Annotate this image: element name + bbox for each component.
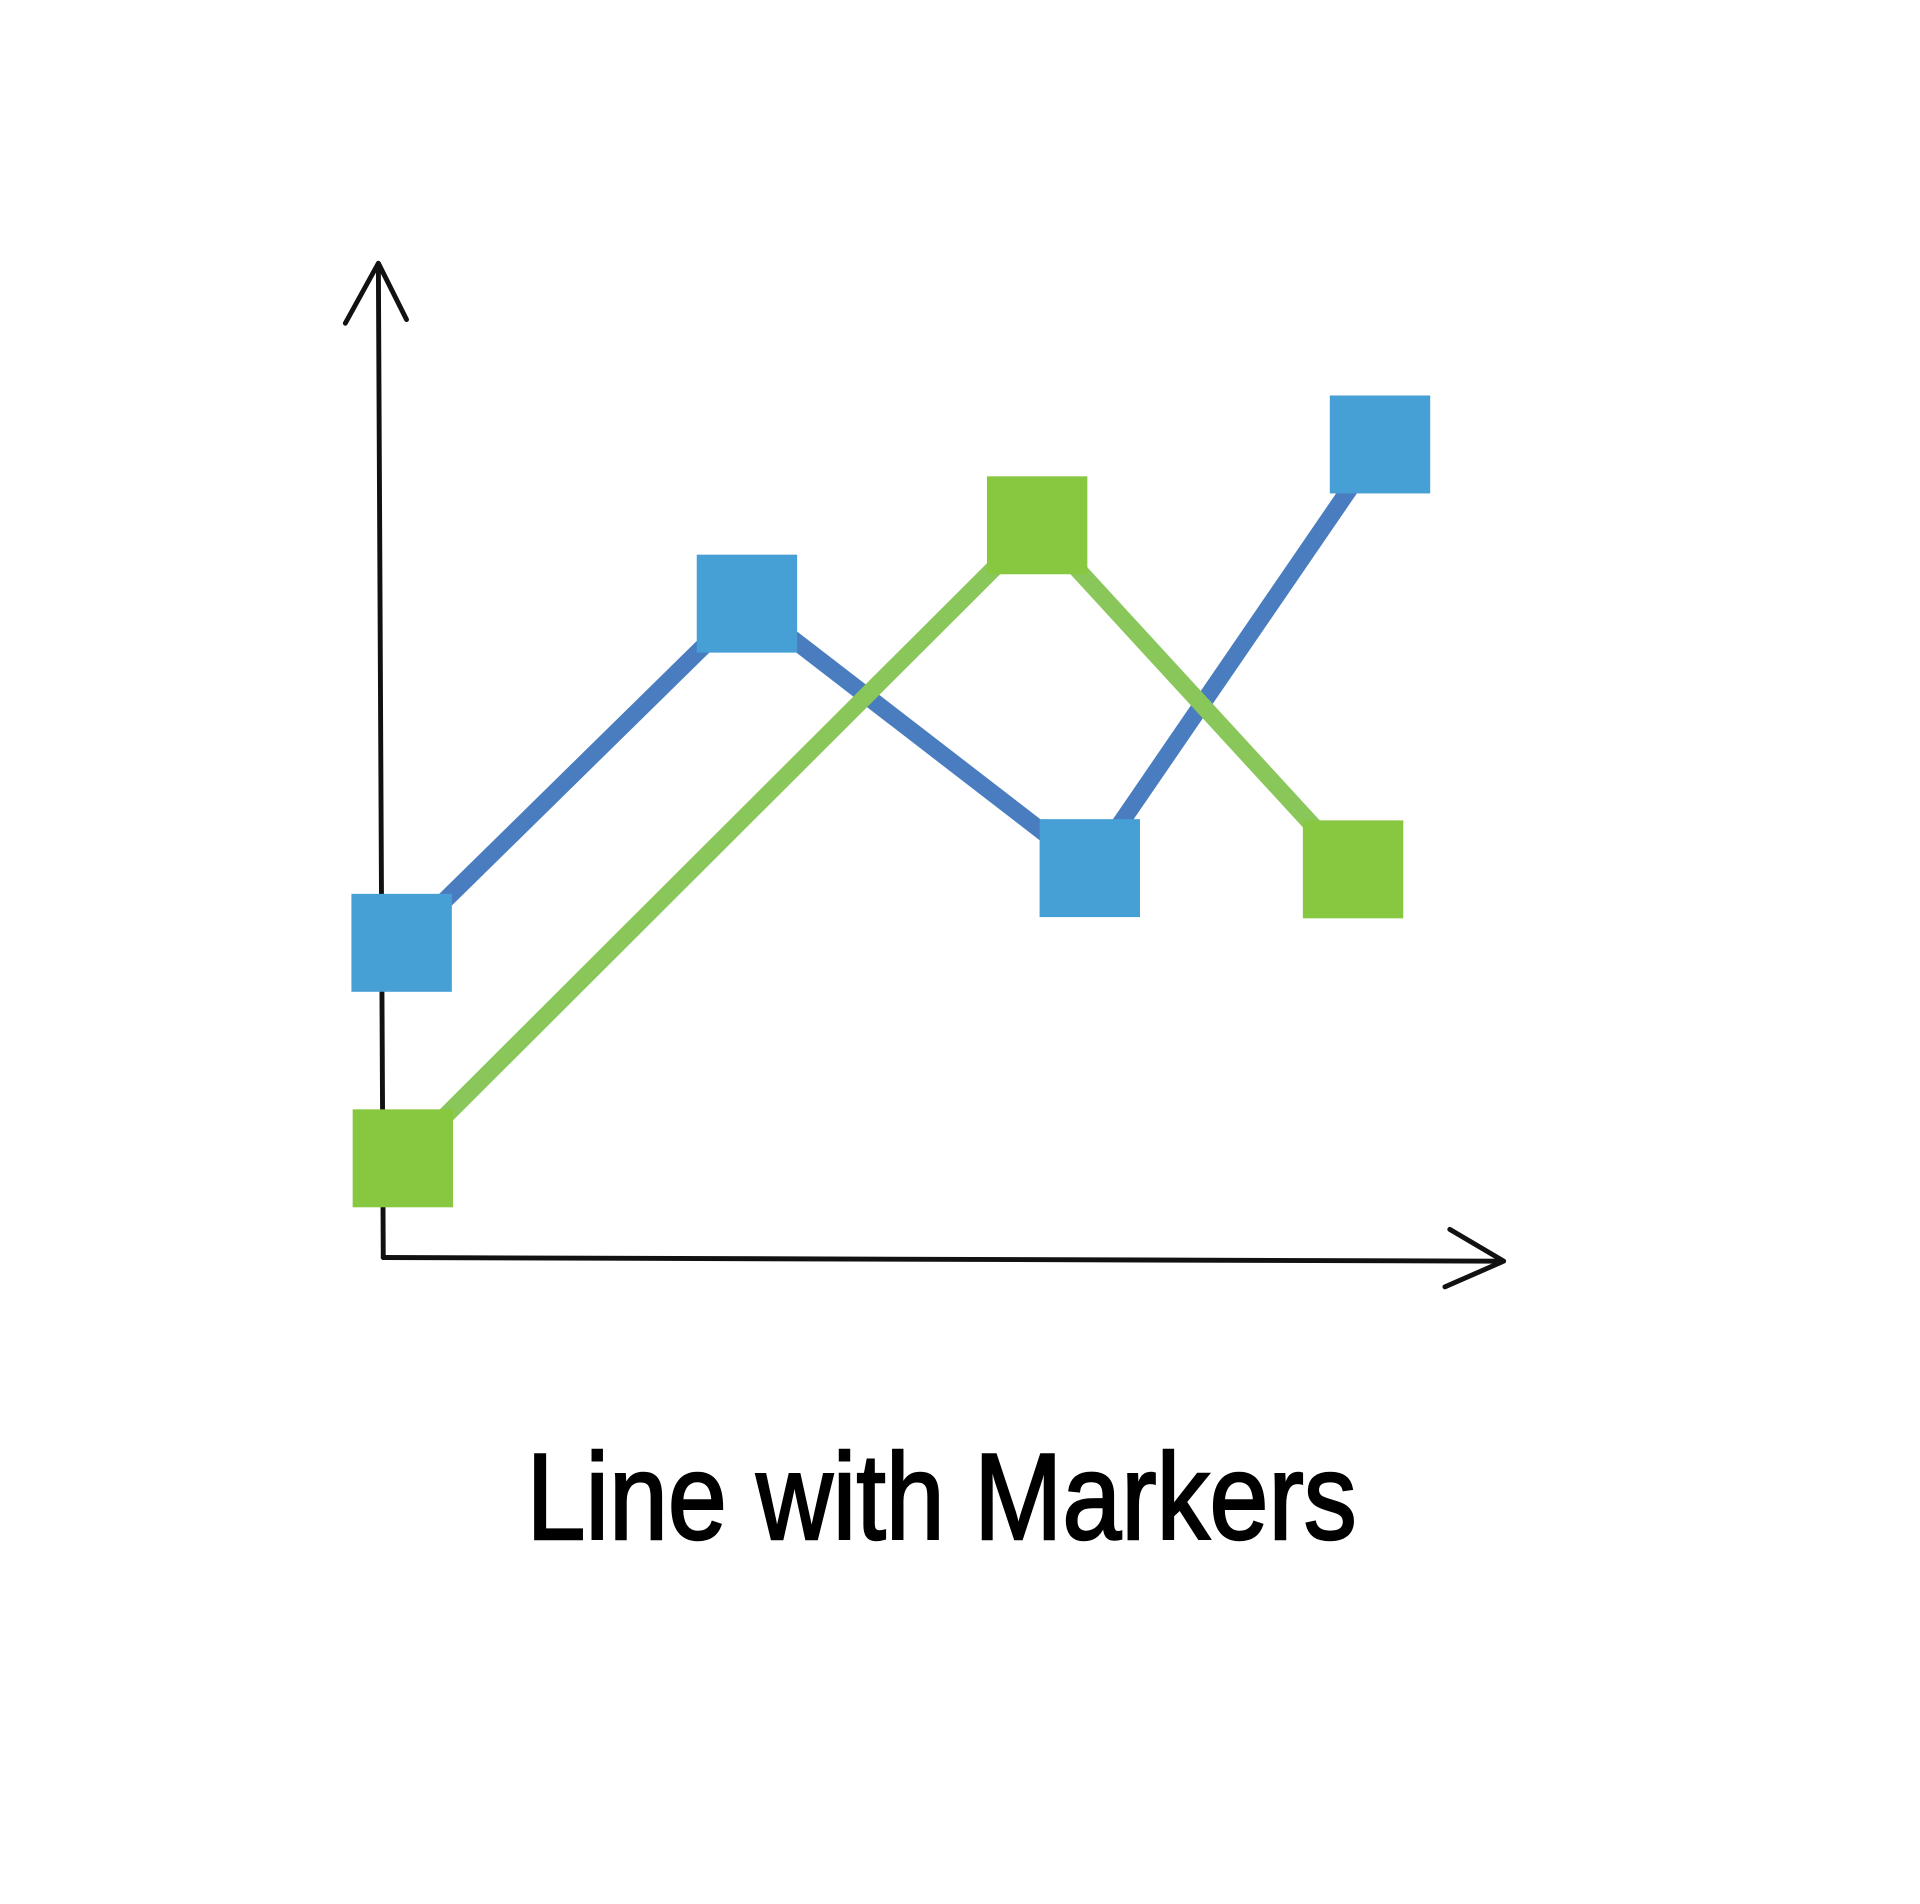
green markers: [353, 476, 1403, 1207]
x axis with arrow: [383, 1229, 1504, 1287]
y axis with arrow: [345, 263, 407, 1257]
blue markers: [351, 395, 1430, 992]
green series line: [403, 525, 1353, 1158]
blue series line: [402, 444, 1380, 943]
title: Line with Markers: [527, 1428, 1357, 1565]
